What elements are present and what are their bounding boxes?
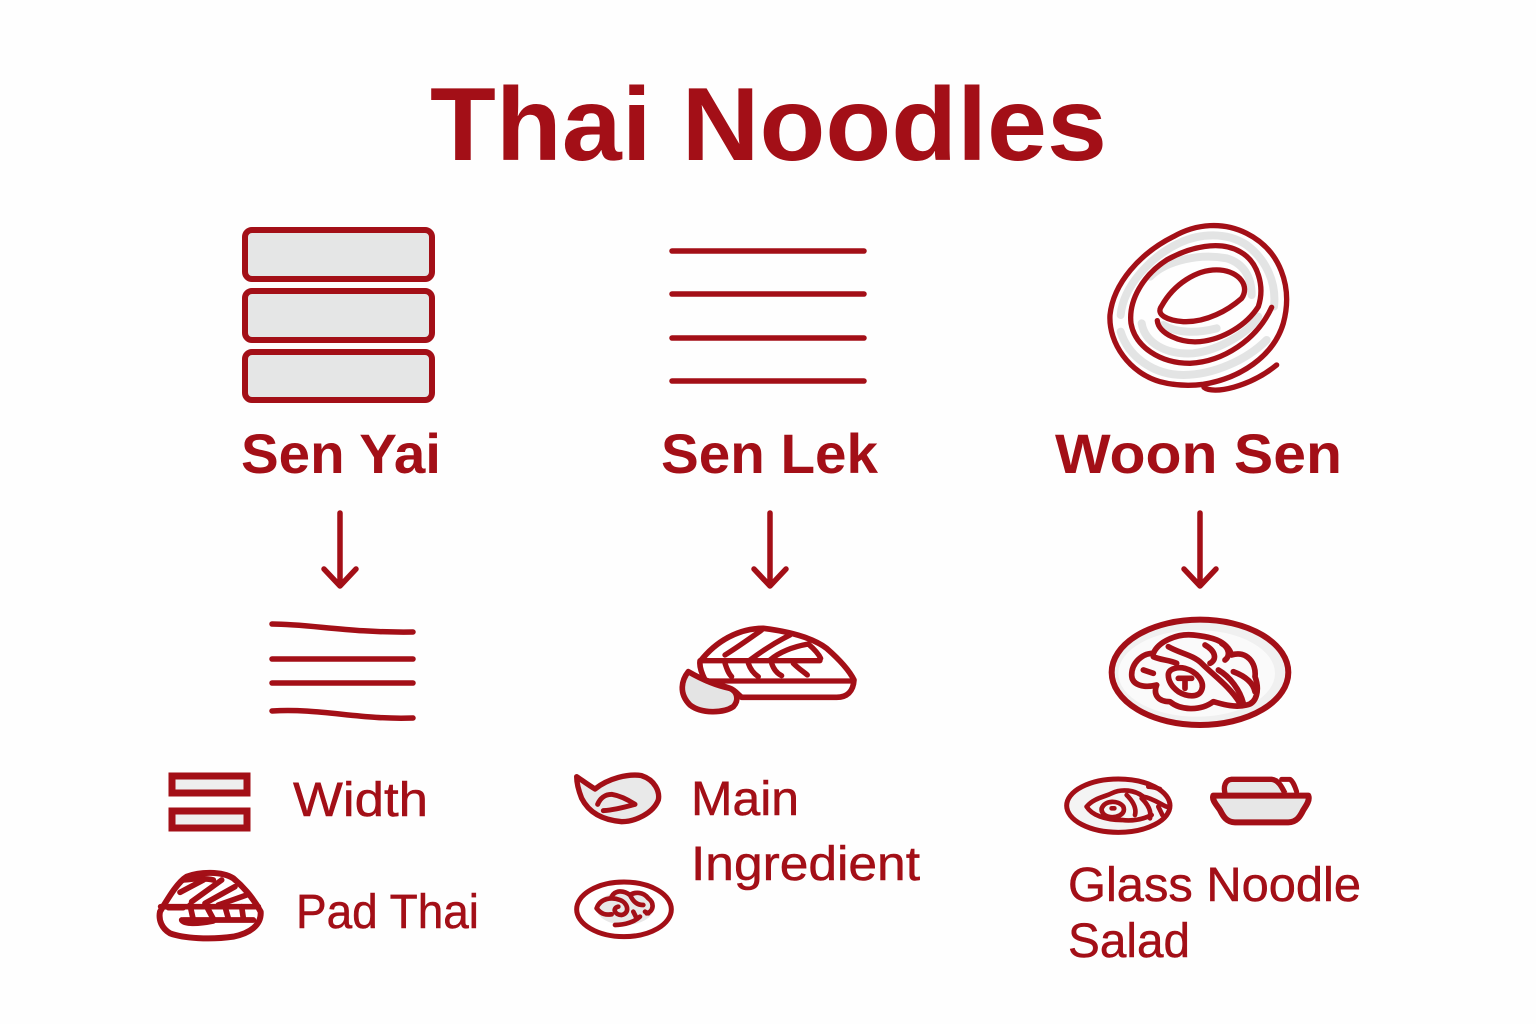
icon: small plate	[577, 882, 671, 937]
title: Thai Noodles	[430, 67, 1107, 183]
panel: Sen Yai	[160, 230, 479, 939]
icon: lime wedge	[577, 775, 659, 822]
label: Glass Noodle Salad: Glass Noodle	[1068, 859, 1361, 912]
panel: Sen Lek: Ingredient	[691, 838, 920, 891]
label: Width: Width	[293, 774, 428, 827]
icon: large plate of noodles	[1112, 620, 1288, 725]
icon: small noodle salad plate	[1067, 779, 1170, 832]
icon: fish fillet and lime	[682, 628, 854, 712]
icon: three wide noodle bands	[245, 230, 432, 400]
heading: Sen Yai: Sen Yai	[241, 422, 441, 485]
panel: Woon Sen: Salad	[1068, 915, 1190, 968]
icon: width bands	[172, 776, 247, 828]
label: Main Ingredient: Main	[691, 773, 799, 826]
heading: Woon Sen: Woon Sen	[1055, 422, 1342, 485]
icon: thin noodle lines	[672, 251, 864, 381]
arrow: Sen Yai	[324, 513, 356, 586]
panel: Woon Sen	[1055, 226, 1361, 968]
panel: Sen Lek	[577, 251, 920, 937]
icon: Pad Thai dish	[160, 873, 261, 938]
arrow: Woon Sen	[1184, 513, 1216, 586]
arrow: Sen Lek	[754, 513, 786, 586]
icon: wavy noodles	[272, 624, 413, 718]
heading: Sen Lek: Sen Lek	[661, 422, 879, 485]
icon: noodle bowl	[1213, 779, 1309, 822]
label: Pad Thai: Pad Thai	[296, 886, 479, 939]
icon: glass noodle coil	[1110, 226, 1287, 390]
